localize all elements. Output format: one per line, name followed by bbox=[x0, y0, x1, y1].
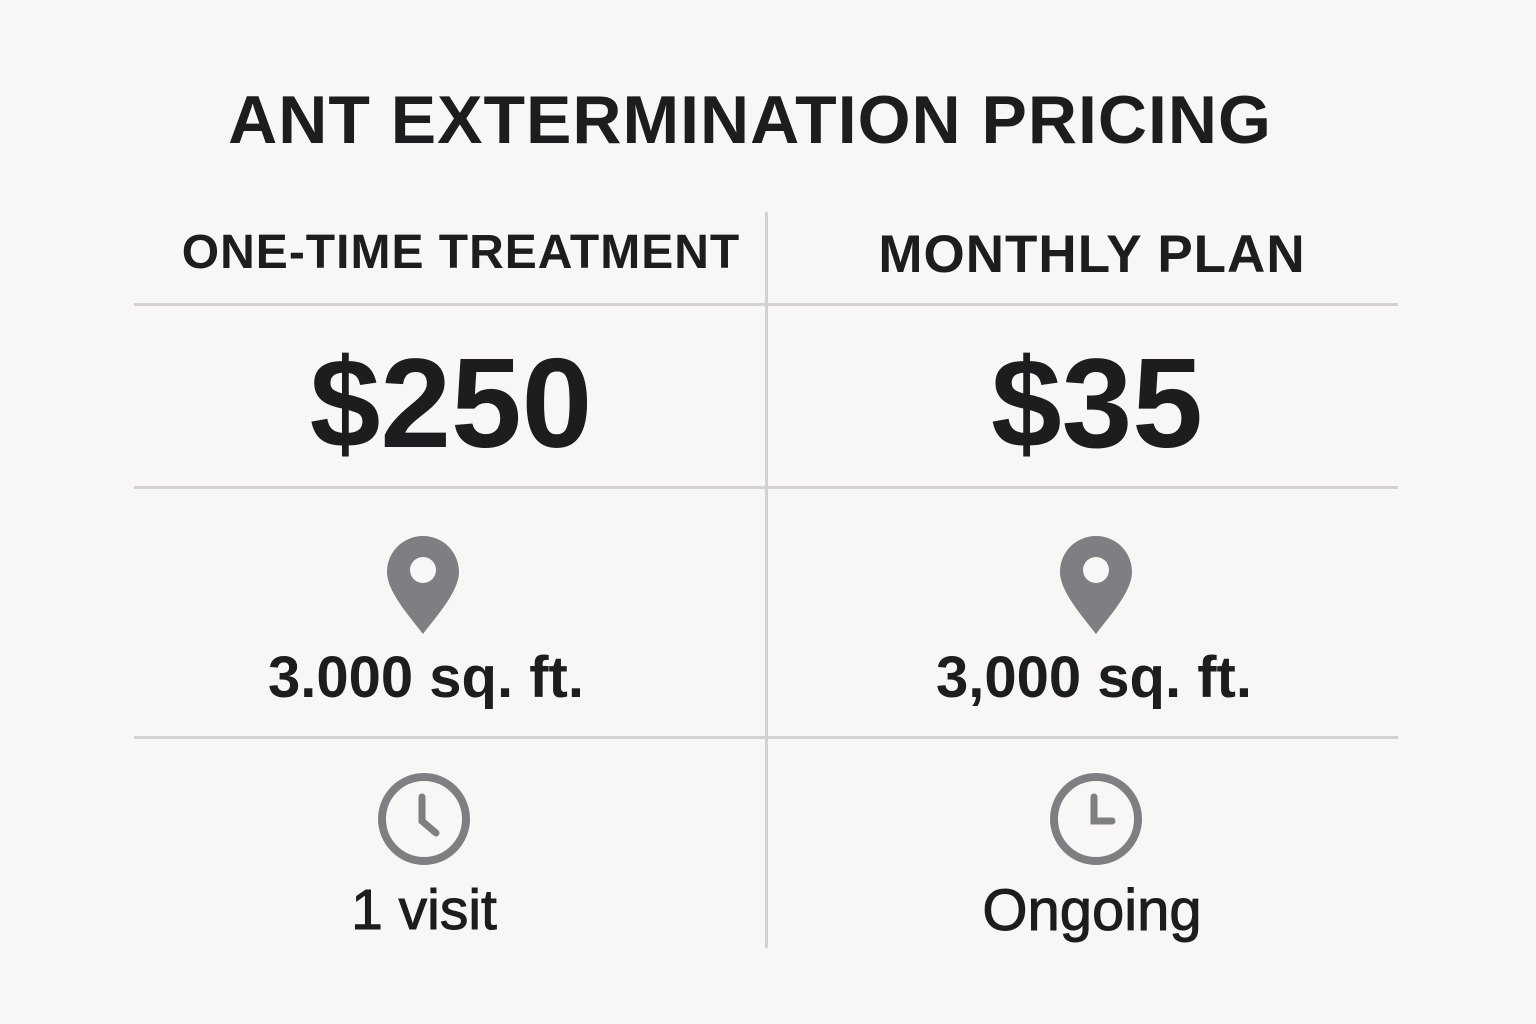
header: monthly plan: MONTHLY PLAN bbox=[878, 225, 1306, 284]
header: one-time treatment: ONE-TIME TREATMENT bbox=[182, 226, 740, 279]
icon: location pin right bbox=[1060, 536, 1132, 634]
icon: location pin left bbox=[387, 536, 459, 634]
area right: 3,000 sq. ft. bbox=[936, 645, 1252, 710]
area left: 3.000 sq. ft. bbox=[268, 645, 584, 710]
price: $35: $35 bbox=[991, 332, 1203, 474]
duration right: Ongoing bbox=[982, 878, 1202, 943]
icon: clock left bbox=[378, 773, 470, 865]
price: $250: $250 bbox=[310, 332, 592, 474]
title: ANT EXTERMINATION PRICING bbox=[228, 82, 1272, 158]
icon: clock right bbox=[1050, 773, 1142, 865]
duration left: 1 visit bbox=[351, 878, 497, 942]
